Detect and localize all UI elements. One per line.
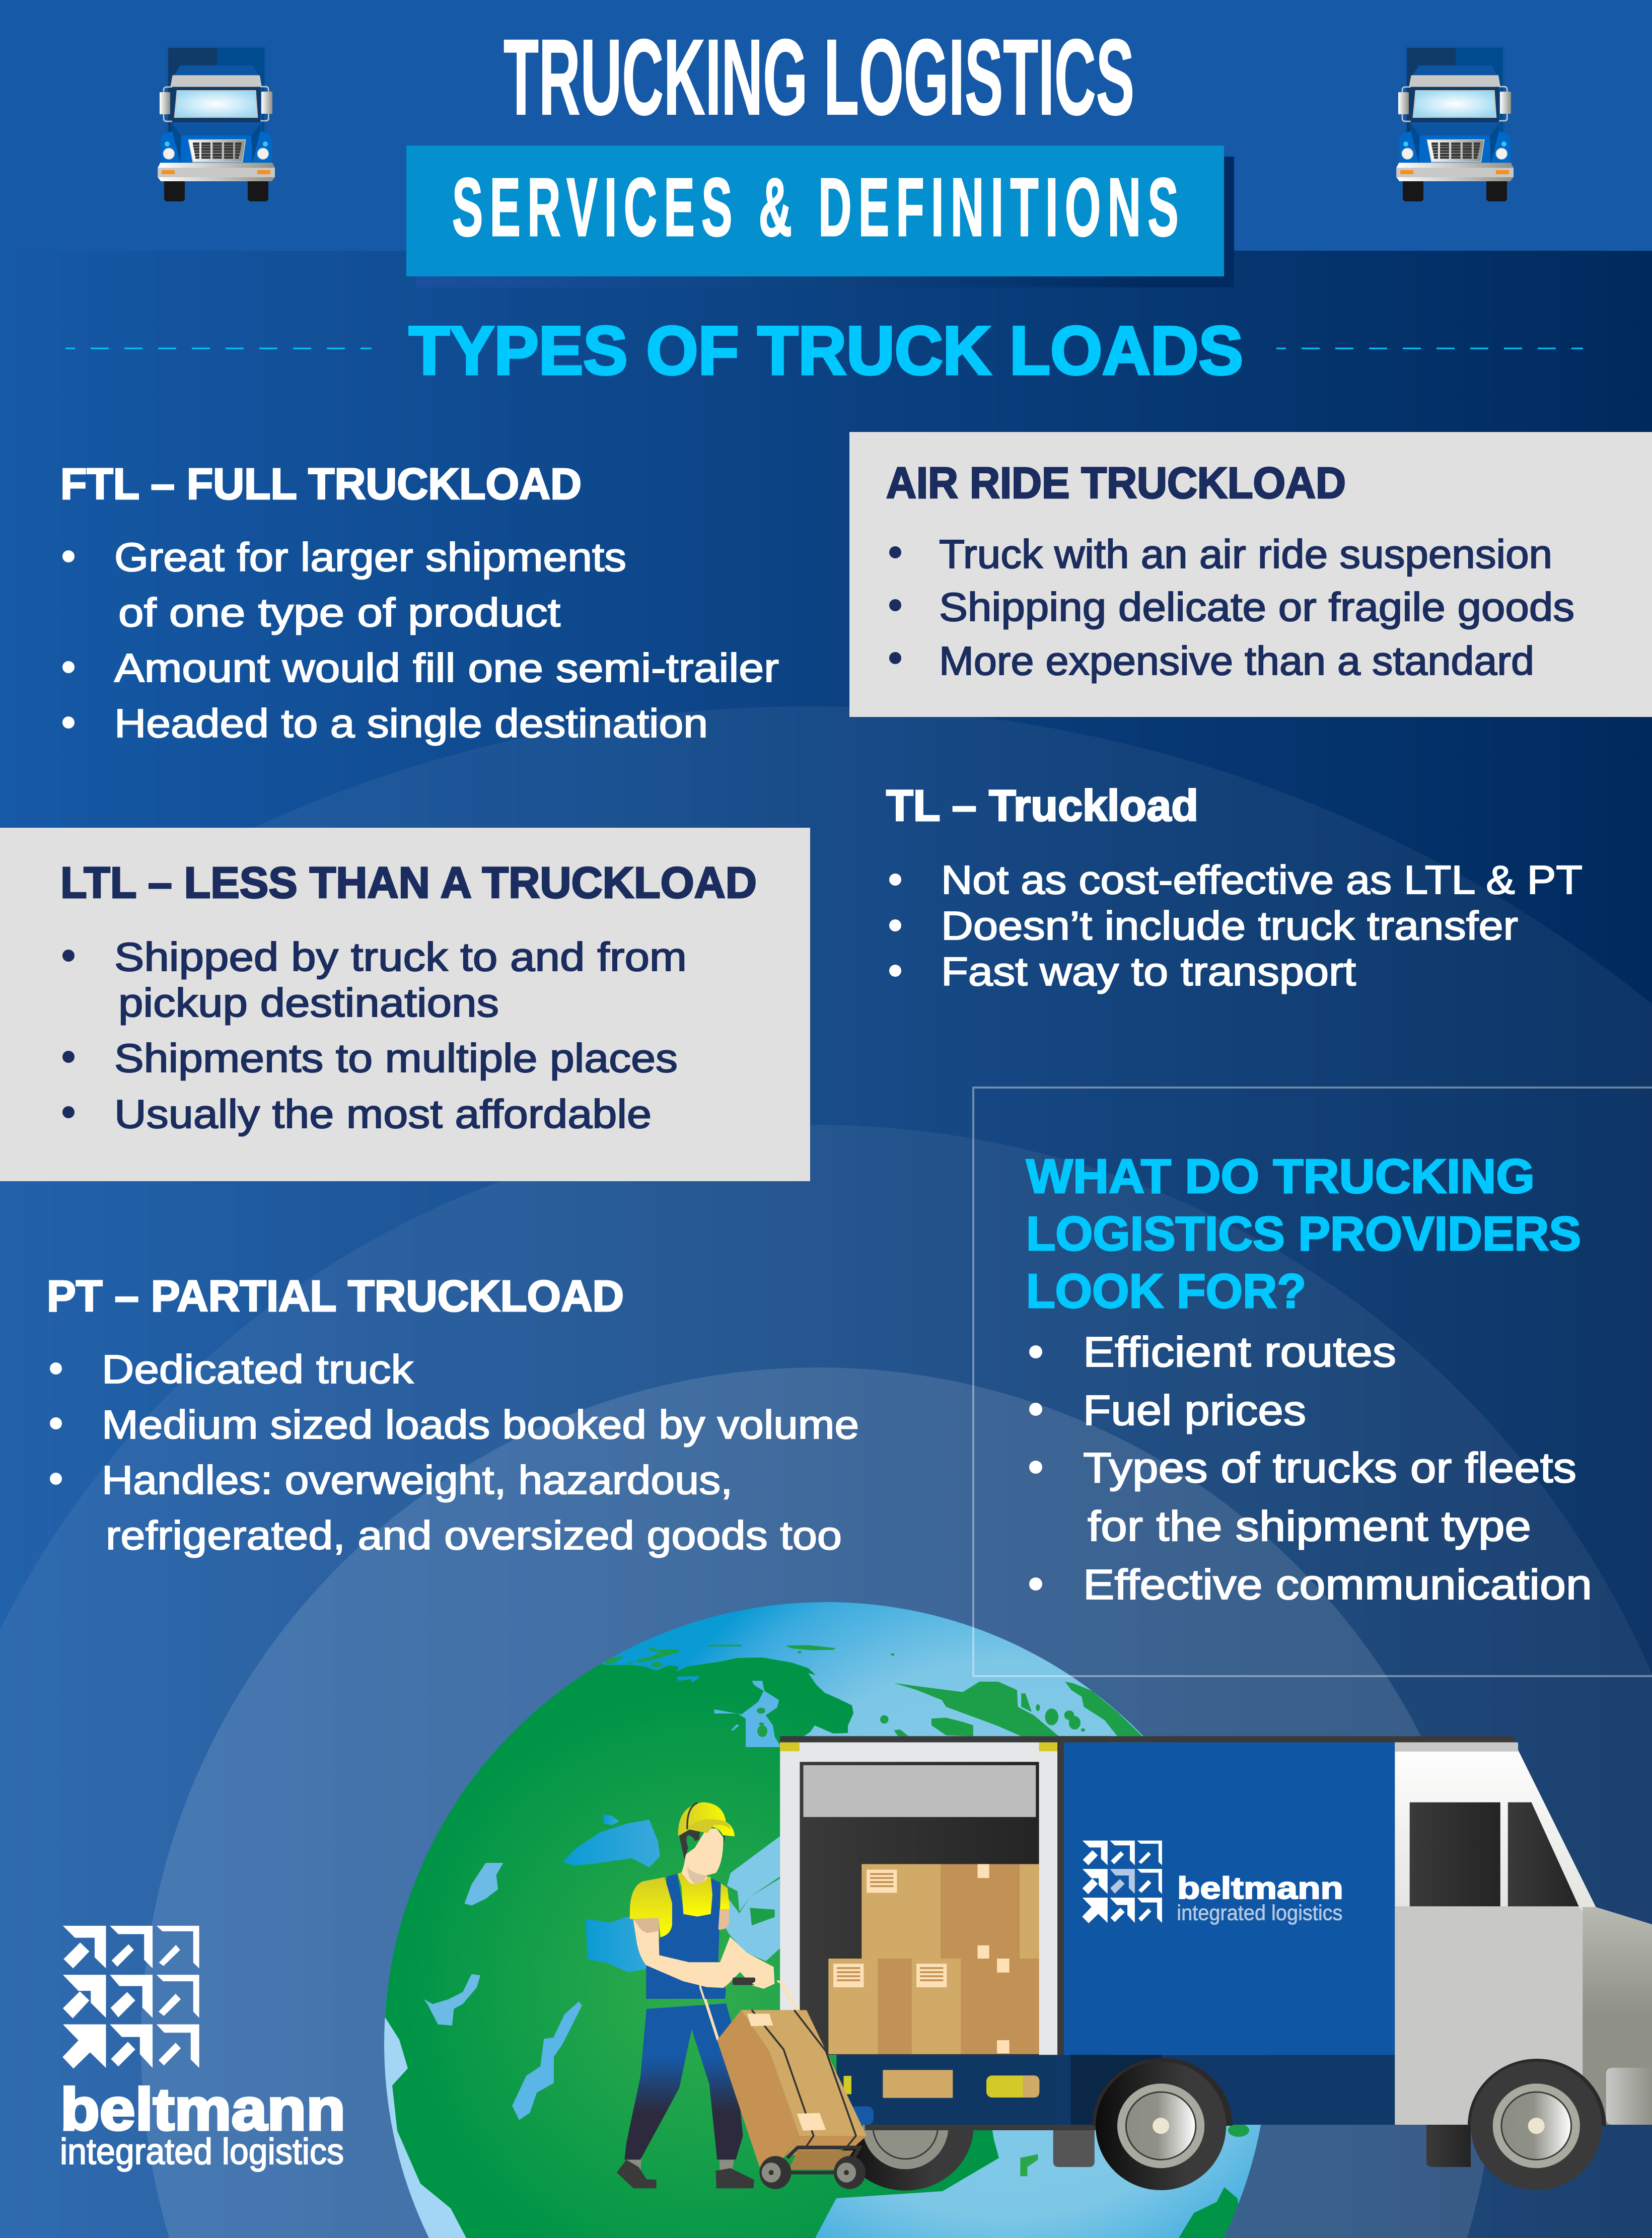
seas and islands, northern region bbox=[604, 1645, 1142, 1747]
subtitle banner bbox=[406, 146, 1234, 287]
heading: TL: TL – Truckload bbox=[886, 781, 1198, 830]
heading: FTL: FTL – FULL TRUCKLOAD bbox=[60, 460, 582, 509]
heading: what do providers look for: WHAT DO TRUCKING bbox=[1026, 1149, 1535, 1203]
bullet list: air ride: More expensive than a standard bbox=[939, 638, 1534, 683]
heading: air ride: AIR RIDE TRUCKLOAD bbox=[886, 459, 1346, 508]
land: main continent bbox=[352, 1657, 999, 2238]
bullet list: PT: Handles: overweight, hazardous, bbox=[102, 1458, 733, 1502]
bullet list: LTL: Shipped by truck to and from bbox=[114, 934, 687, 979]
bullet list: providers: for the shipment type bbox=[1088, 1502, 1531, 1550]
globe bbox=[352, 1602, 1268, 2238]
bullet list: FTL: Headed to a single destination bbox=[114, 701, 708, 746]
bullet list: PT: Dedicated truck bbox=[102, 1347, 414, 1392]
bullet list: FTL: Amount would fill one semi-trailer bbox=[114, 645, 779, 690]
bullet list: air ride bbox=[889, 532, 1574, 683]
bullet list: FTL: of one type of product bbox=[118, 590, 560, 635]
heading: what do providers look for: LOGISTICS PROVIDERS bbox=[1026, 1207, 1581, 1261]
heading: LTL: LTL – LESS THAN A TRUCKLOAD bbox=[60, 858, 757, 907]
worker legs, hand truck and parcel bbox=[617, 1981, 867, 2189]
icon: truck front left bbox=[158, 46, 275, 201]
bullet list: air ride: Truck with an air ride suspension bbox=[939, 532, 1552, 576]
bullet list: providers bbox=[1029, 1328, 1592, 1608]
bullet list: LTL bbox=[62, 934, 687, 1136]
bullet list: TL: Doesn’t include truck transfer bbox=[941, 903, 1518, 948]
lakes, central region bbox=[554, 1814, 1038, 2176]
delivery worker with hand truck bbox=[617, 1802, 867, 2189]
logo wordmark: beltmann bbox=[60, 2076, 345, 2143]
bullet list: FTL: Great for larger shipments bbox=[114, 535, 626, 580]
parcel on hand truck bbox=[717, 2010, 867, 2189]
cargo boxes bbox=[828, 1864, 1039, 2054]
rear wheel bbox=[837, 2061, 974, 2191]
logo: beltmann integrated logistics bbox=[60, 1926, 345, 2172]
panel: air ride truckload bbox=[849, 432, 1652, 717]
truck door logo bbox=[1082, 1841, 1343, 1925]
bullet list: providers: Effective communication bbox=[1083, 1561, 1592, 1608]
bullet list: LTL: Shipments to multiple places bbox=[114, 1036, 678, 1080]
bullet list: TL bbox=[889, 857, 1583, 994]
worker upper body bbox=[630, 1802, 789, 1999]
mud flap bbox=[1053, 2130, 1095, 2167]
front wheel bbox=[1468, 2059, 1606, 2190]
logo mark bbox=[62, 1926, 199, 2068]
truck door logo: beltmann bbox=[1177, 1871, 1343, 1906]
panel: TL truckload bbox=[886, 781, 1583, 994]
lakes, west bbox=[424, 1863, 554, 2120]
step bbox=[1426, 2125, 1471, 2167]
cab bbox=[1395, 1743, 1652, 2125]
bullet list: PT: Medium sized loads booked by volume bbox=[102, 1402, 859, 1447]
heading: what do providers look for bbox=[1026, 1149, 1581, 1318]
heading: PT: PT – PARTIAL TRUCKLOAD bbox=[47, 1272, 624, 1321]
bullet list: air ride: Shipping delicate or fragile goods bbox=[939, 585, 1574, 629]
panel: PT partial truckload bbox=[47, 1272, 859, 1558]
delivery truck bbox=[780, 1736, 1652, 2191]
bullet list: LTL: Usually the most affordable bbox=[114, 1092, 652, 1136]
bullet list: PT bbox=[50, 1347, 859, 1558]
bullet list: TL: Fast way to transport bbox=[941, 949, 1356, 994]
truck body and cab bbox=[1053, 1736, 1652, 2190]
heading: what do providers look for: LOOK FOR? bbox=[1026, 1264, 1306, 1318]
panel: LTL less than a truckload bbox=[0, 828, 810, 1181]
section heading: types of truck loads: TYPES OF TRUCK LOADS bbox=[409, 312, 1243, 389]
title: TRUCKING LOGISTICS bbox=[504, 17, 1134, 137]
outlined panel: what do trucking logistics providers look for bbox=[973, 1088, 1652, 1676]
bullet list: providers: Types of trucks or fleets bbox=[1083, 1444, 1576, 1491]
truck rear: open cargo door and boxes bbox=[780, 1736, 1109, 2191]
chassis bbox=[836, 2055, 1109, 2130]
logo tagline: integrated logistics bbox=[60, 2132, 344, 2172]
icon: truck front right bbox=[1396, 46, 1514, 201]
middle wheel bbox=[1092, 2058, 1233, 2190]
bullet list: providers: Efficient routes bbox=[1083, 1328, 1396, 1376]
bullet list: PT: refrigerated, and oversized goods too bbox=[106, 1513, 842, 1558]
worker cap bbox=[678, 1802, 735, 1836]
bullet list: LTL: pickup destinations bbox=[118, 980, 499, 1025]
bullet list: TL: Not as cost-effective as LTL & PT bbox=[941, 857, 1583, 902]
bullet list: providers: Fuel prices bbox=[1083, 1387, 1306, 1434]
truck door logo: integrated logistics bbox=[1177, 1901, 1342, 1925]
land: south east bbox=[1179, 2124, 1249, 2238]
panel: FTL full truckload bbox=[60, 460, 779, 746]
bullet list: FTL bbox=[62, 535, 779, 746]
